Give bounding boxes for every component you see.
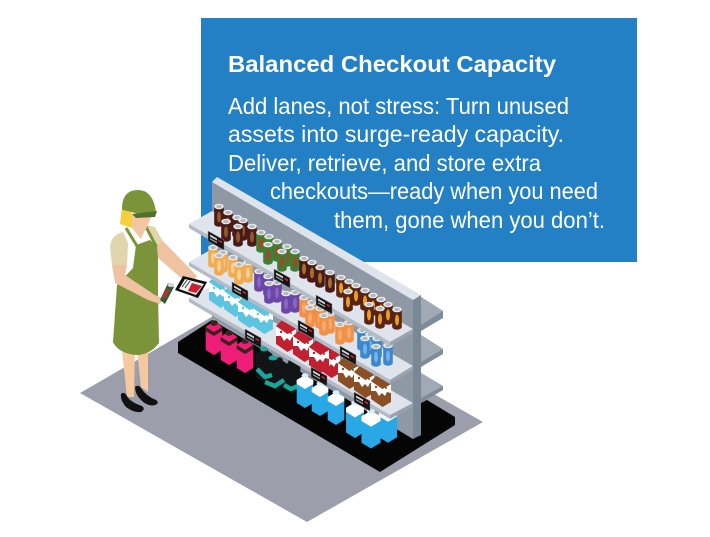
body copy: assets into surge-ready capacity. (228, 121, 564, 147)
apron straps (126, 225, 157, 248)
hat (122, 190, 156, 215)
back panel (212, 182, 413, 439)
body copy: checkouts—ready when you need (270, 178, 598, 204)
back leg (122, 350, 135, 397)
floor products (206, 320, 397, 449)
tablet (175, 276, 207, 298)
top shelf (189, 211, 413, 346)
red cartons (276, 318, 340, 378)
black and teal jugs (256, 346, 300, 394)
neck and face (132, 215, 152, 239)
blue text panel (201, 18, 637, 262)
light orange cans (208, 245, 253, 285)
brown cartons (338, 355, 391, 407)
collar (128, 225, 150, 243)
pink jugs (206, 320, 253, 373)
light blue cartons (209, 274, 273, 334)
left sleeve (110, 232, 128, 265)
green cans (256, 230, 300, 272)
back panel top edge (212, 177, 421, 300)
body copy: Deliver, retrieve, and store extra (228, 150, 541, 176)
dark orange-label cans (336, 275, 402, 330)
bottom shelf (189, 286, 413, 419)
left arm (112, 265, 163, 304)
hair (120, 207, 132, 228)
shopper figure (110, 190, 207, 412)
shelf arms (421, 297, 443, 403)
middle shelf (189, 249, 413, 384)
floor (80, 292, 483, 522)
blue cans (357, 328, 393, 367)
shoes (121, 386, 158, 412)
black display base (178, 320, 455, 472)
blue jugs (297, 373, 397, 449)
shelf unit (212, 177, 443, 439)
bottom shelf cartons (209, 274, 391, 407)
middle shelf cans (208, 245, 393, 367)
post (413, 295, 421, 439)
heading: Balanced Checkout Capacity (228, 51, 556, 77)
apron (113, 240, 159, 355)
right sleeve (147, 225, 162, 247)
front leg (137, 350, 148, 392)
body copy (228, 93, 605, 233)
scanner can (160, 283, 174, 304)
orange cans (299, 295, 354, 345)
purple cans (254, 269, 300, 314)
top shelf cans (214, 204, 402, 330)
hat brim (132, 211, 157, 218)
right arm (157, 240, 197, 283)
brown cans (299, 256, 335, 293)
shelf price tags (208, 231, 370, 411)
body copy: Add lanes, not stress: Turn unused (228, 93, 569, 119)
dark brown cans (214, 204, 257, 247)
body copy: them, gone when you don’t. (334, 207, 605, 233)
